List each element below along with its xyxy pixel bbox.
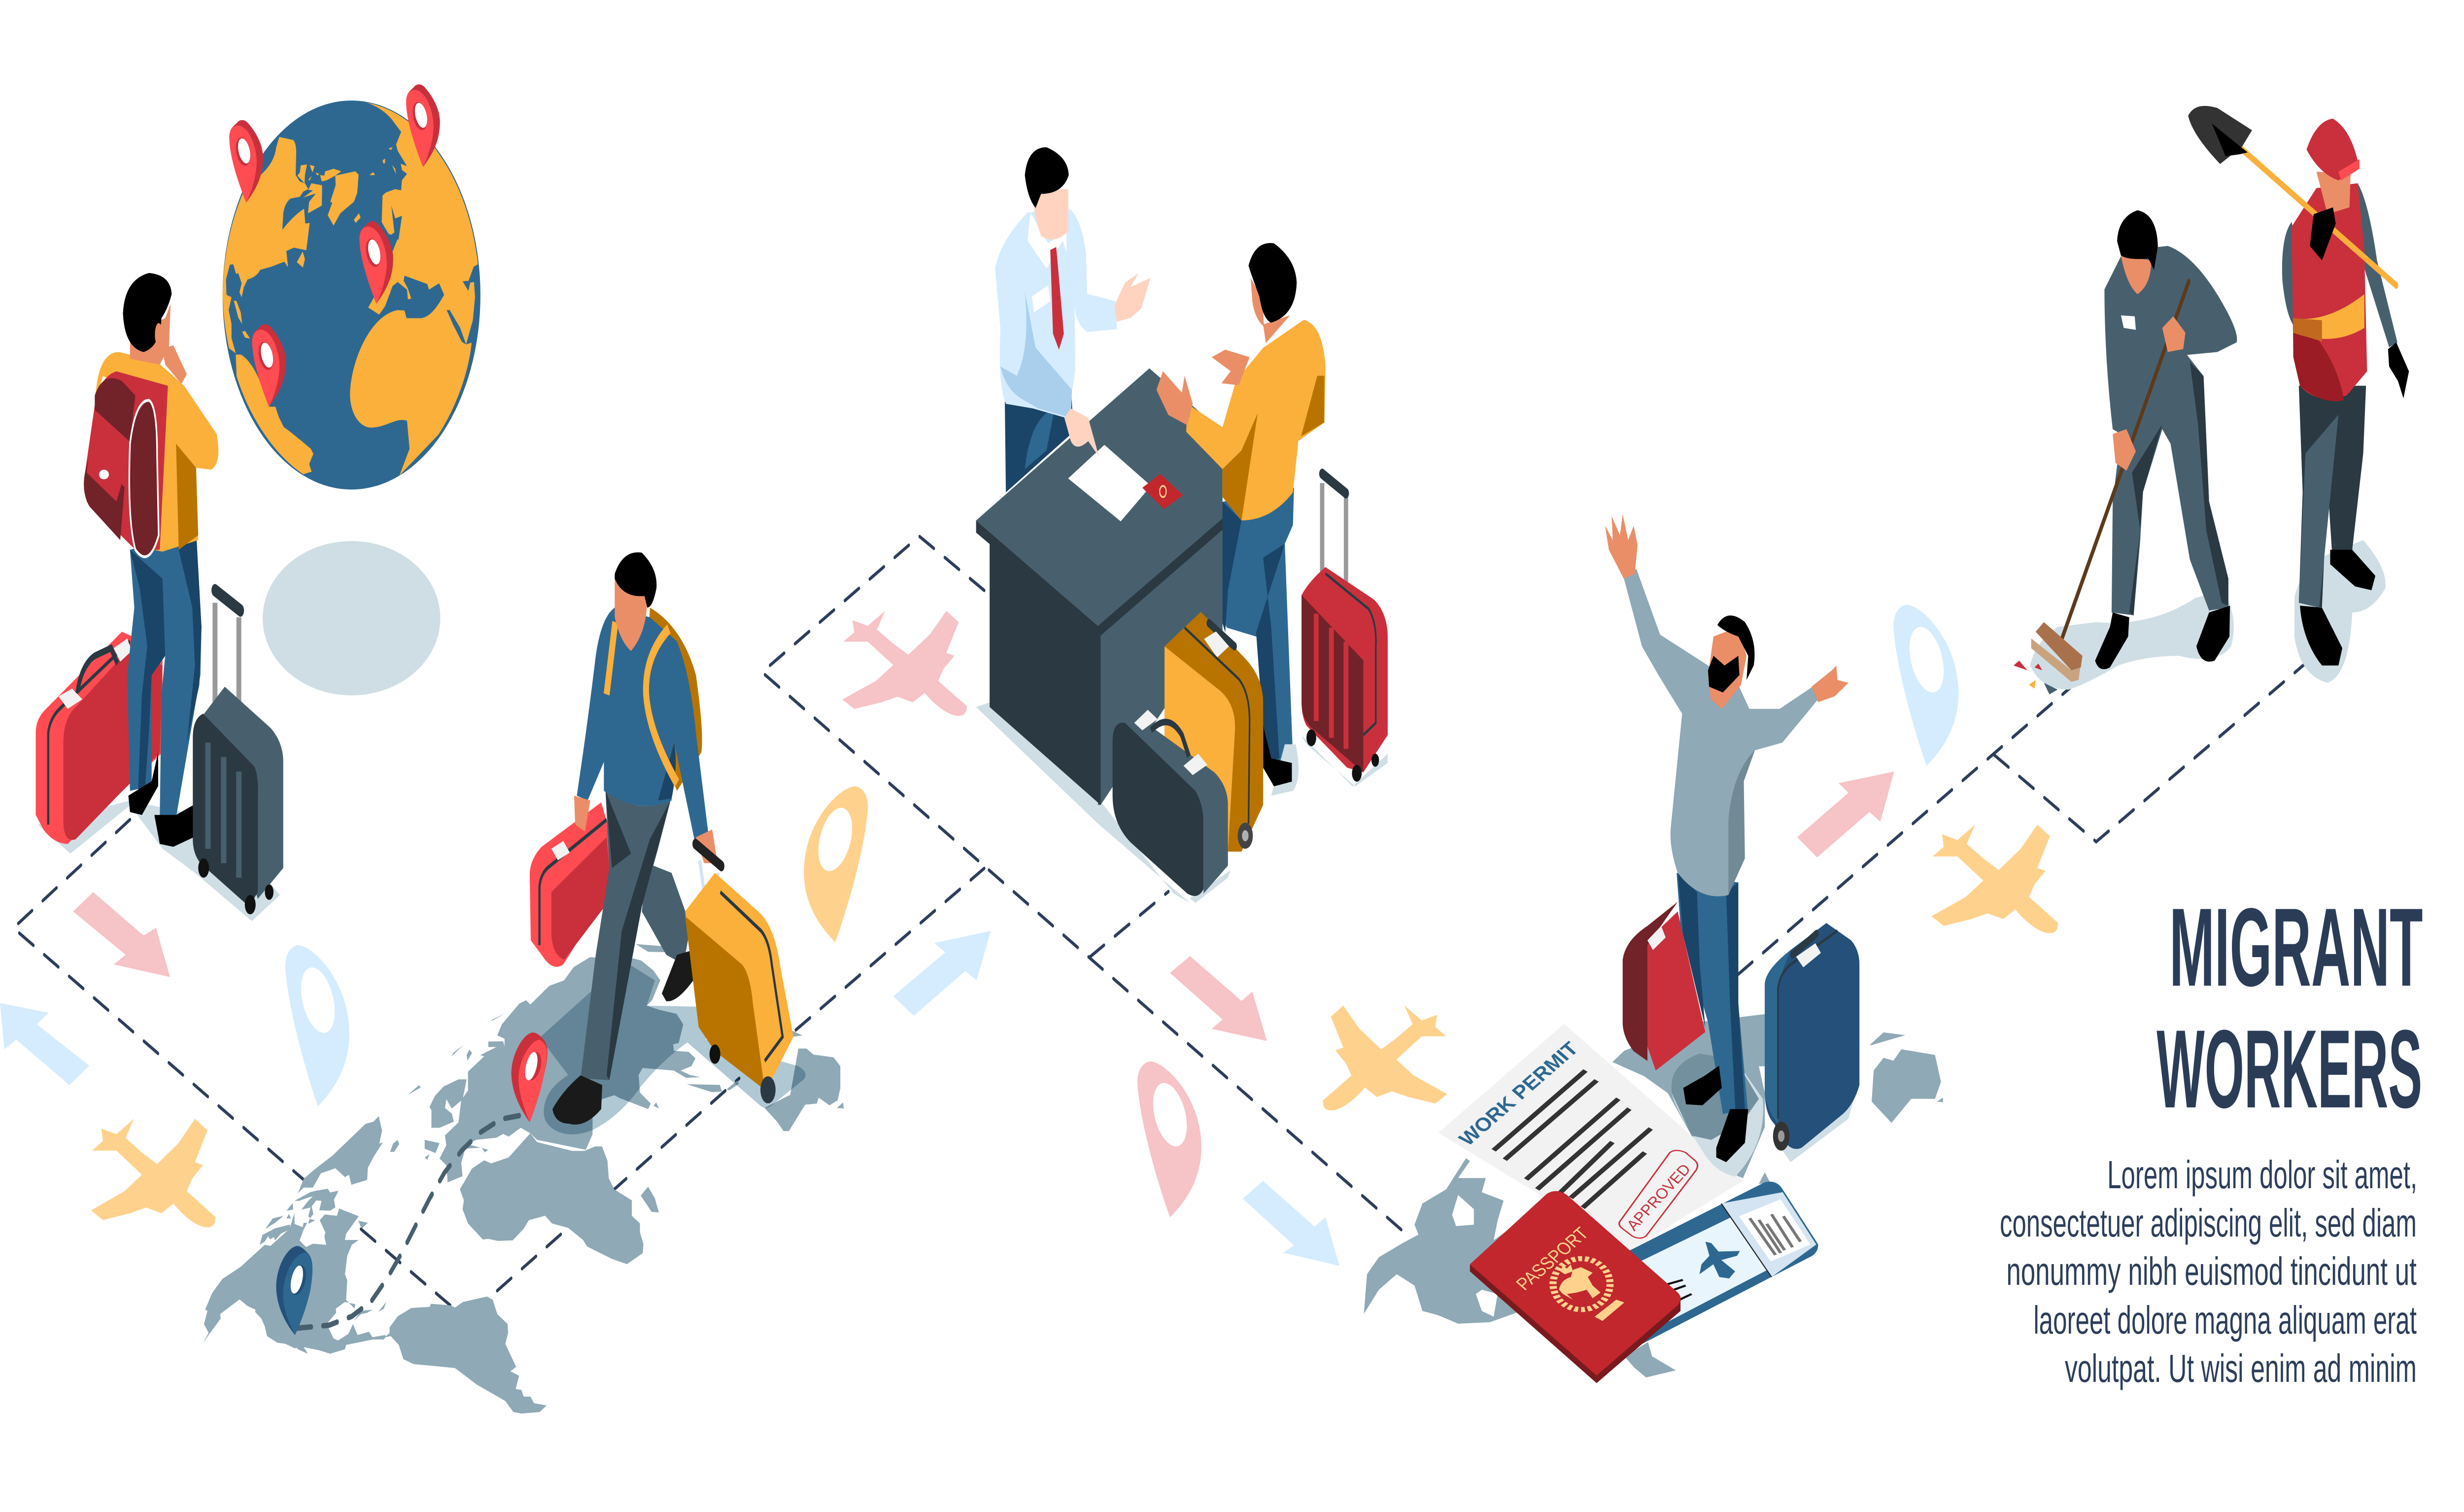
worker with shovel — [2188, 106, 2409, 683]
name tag — [1032, 285, 1050, 312]
desk — [976, 368, 1223, 805]
overalls — [2104, 246, 2237, 616]
cheering man — [1605, 514, 1859, 1162]
person with backpack looking at globe — [36, 273, 283, 921]
body text: volutpat. Ut wisi enim ad minim — [2065, 1347, 2417, 1391]
backpack — [84, 371, 168, 557]
maroon rolling suitcase — [1301, 474, 1388, 786]
body text: laoreet dolore magna aliquam erat — [2033, 1299, 2417, 1342]
debris — [2014, 661, 2042, 670]
yellow suitcase — [685, 844, 793, 1103]
trousers — [1005, 385, 1074, 492]
boarding pass — [1616, 1182, 1818, 1345]
approved stamp: APPROVED — [1623, 1161, 1694, 1234]
clerk — [995, 147, 1151, 492]
head and hands — [574, 552, 718, 863]
body text: Lorem ipsum dolor sit amet, — [2107, 1153, 2417, 1197]
front shoe — [552, 1075, 602, 1125]
floor shadow — [38, 800, 280, 921]
head — [2117, 210, 2158, 294]
shoes — [1683, 1065, 1748, 1162]
globe shadow — [263, 541, 441, 695]
red suitcase — [1623, 902, 1705, 1070]
tie — [1050, 247, 1064, 350]
broom — [2031, 281, 2189, 682]
world map: Americas — [203, 1085, 547, 1413]
red suitcase — [530, 802, 615, 967]
shoes — [128, 752, 194, 847]
sweater — [1623, 569, 1818, 896]
passport label: PASSPORT — [1512, 1224, 1593, 1294]
yellow suitcase — [1164, 612, 1263, 852]
map pin: destination red — [512, 1032, 548, 1122]
safety vest — [2292, 183, 2367, 401]
shovel — [2188, 106, 2396, 285]
paper — [1068, 445, 1151, 521]
gloves — [2310, 207, 2409, 398]
shirt — [995, 208, 1117, 418]
pale arrows and icons centre — [804, 611, 1447, 1266]
orange sweater — [95, 352, 218, 551]
passport on desk — [1142, 474, 1183, 509]
pale arrows and icons right — [1797, 605, 2058, 933]
red suitcase — [36, 632, 163, 844]
customer behind desk — [1218, 488, 1299, 795]
traveller floor shadows — [540, 965, 806, 1134]
shoes — [2095, 606, 2230, 669]
shoe — [1271, 744, 1299, 795]
map pin: origin blue — [276, 1246, 312, 1335]
sweater — [577, 608, 709, 839]
hands — [1605, 514, 1848, 702]
pale arrows and icons left — [0, 892, 349, 1227]
jeans — [1218, 488, 1294, 763]
back leg — [642, 863, 690, 964]
head with beard — [1708, 616, 1754, 709]
clerk pointing hand — [1064, 409, 1099, 457]
body text: nonummy nibh euismod tincidunt ut — [2006, 1250, 2417, 1294]
jeans — [1677, 873, 1747, 1114]
world map: Eurasia and Africa — [425, 944, 844, 1264]
emblem — [1553, 1259, 1624, 1321]
walking traveller — [530, 552, 793, 1125]
title — [2156, 885, 2423, 1131]
backpack — [645, 608, 702, 791]
street sweeper — [2014, 210, 2237, 694]
world map under documents — [1364, 1014, 1943, 1377]
back shoe — [662, 950, 694, 1001]
clerk raised hand — [1114, 273, 1151, 322]
head and helmet — [2306, 119, 2360, 214]
globe — [223, 84, 480, 489]
floor shadow — [2294, 540, 2386, 683]
work permit heading: WORK PERMIT — [1454, 1038, 1583, 1150]
work permit document — [1438, 1024, 1763, 1250]
backpack straps — [607, 622, 677, 783]
floor shadow — [2030, 590, 2234, 689]
passport — [1470, 1191, 1681, 1383]
map pins on globe — [229, 84, 440, 407]
front leg — [581, 791, 671, 1080]
dashed route lines — [13, 536, 2311, 1306]
boots — [2300, 550, 2375, 665]
trousers — [2299, 386, 2366, 608]
blue suitcase — [1765, 923, 1859, 1162]
hands — [2113, 316, 2186, 471]
inland seas — [389, 206, 466, 344]
jeans — [127, 530, 202, 818]
dark suitcase — [1113, 710, 1231, 903]
body text — [2000, 1153, 2417, 1391]
desk shadow — [976, 702, 1190, 903]
flight route on map — [297, 1115, 524, 1328]
body text: consectetuer adipiscing elit, sed diam — [2000, 1202, 2417, 1245]
head — [1025, 147, 1069, 240]
land masses — [223, 103, 478, 476]
customer sweater and head — [1157, 243, 1326, 520]
arms — [2282, 183, 2397, 347]
head and hand — [123, 273, 187, 384]
dark rolling suitcase — [193, 590, 283, 914]
